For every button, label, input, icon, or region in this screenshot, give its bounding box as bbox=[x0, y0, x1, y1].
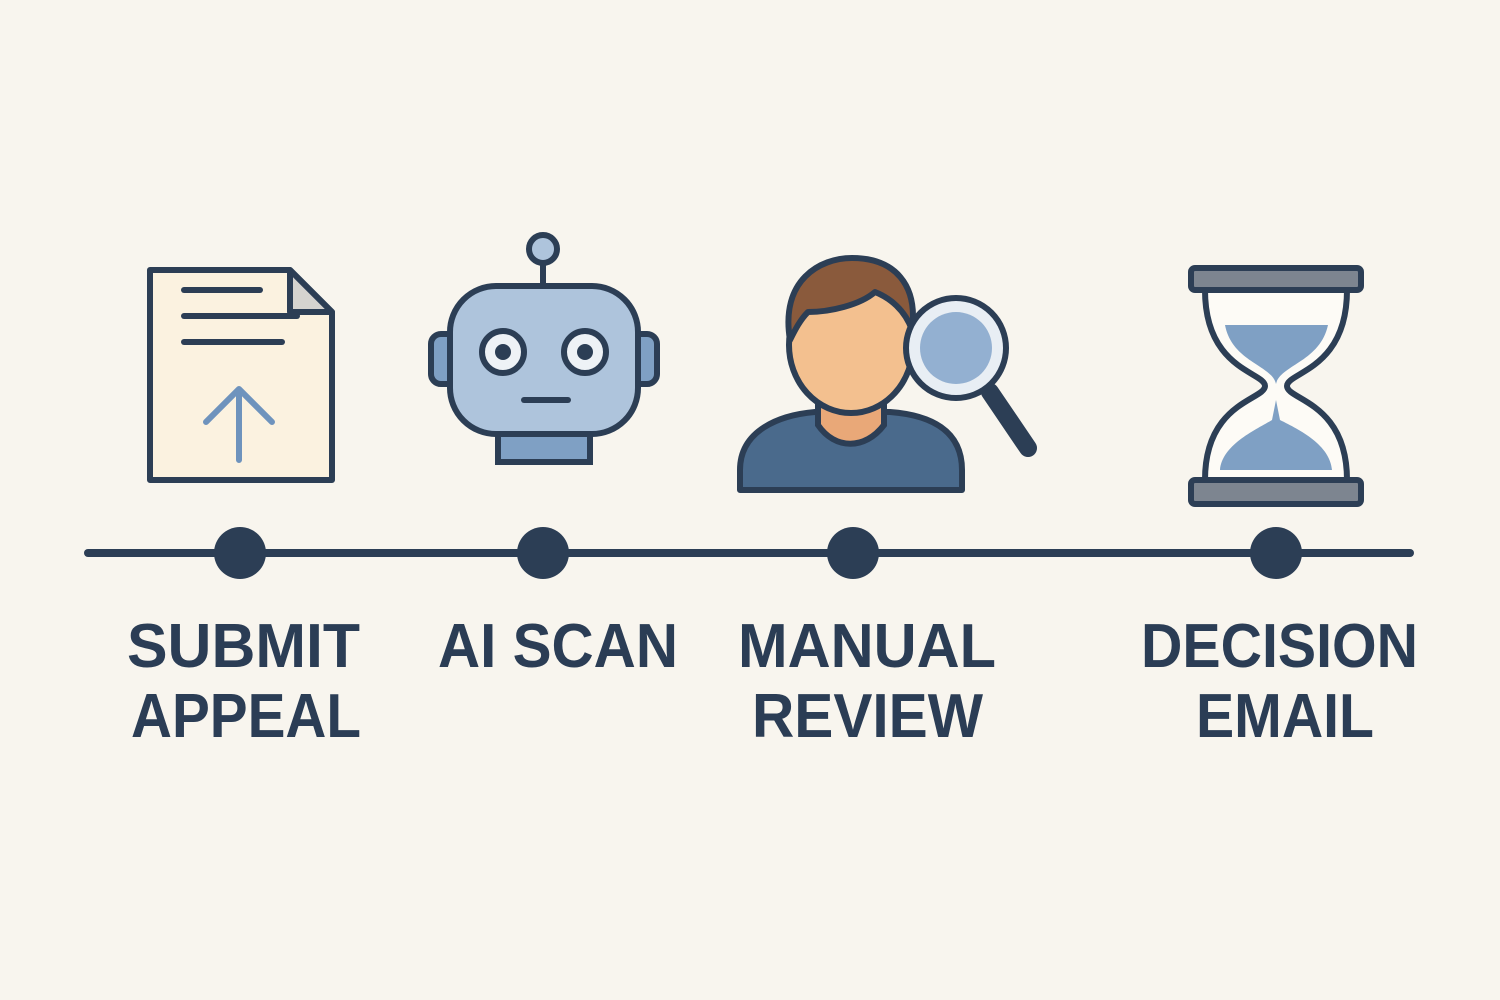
label: manual review: MANUAL bbox=[738, 612, 996, 681]
label: ai scan: AI SCAN bbox=[438, 612, 678, 681]
timeline dot: ai scan bbox=[517, 527, 569, 579]
label: submit appeal bbox=[127, 612, 361, 751]
icon: robot bbox=[431, 235, 657, 462]
timeline dot: submit bbox=[214, 527, 266, 579]
icon: document upload bbox=[150, 270, 332, 480]
timeline line bbox=[88, 527, 1410, 579]
label: manual review bbox=[738, 612, 996, 751]
timeline dot: decision bbox=[1250, 527, 1302, 579]
label: decision email bbox=[1141, 612, 1418, 751]
label: decision email: DECISION bbox=[1141, 612, 1418, 681]
icon: hourglass bbox=[1191, 268, 1361, 504]
label: submit appeal: APPEAL bbox=[131, 682, 361, 751]
label: manual review: REVIEW bbox=[752, 682, 983, 751]
icon: person with magnifier bbox=[740, 258, 1028, 490]
timeline dot: manual review bbox=[827, 527, 879, 579]
label: decision email: EMAIL bbox=[1196, 682, 1374, 751]
label: submit appeal: SUBMIT bbox=[127, 612, 360, 681]
